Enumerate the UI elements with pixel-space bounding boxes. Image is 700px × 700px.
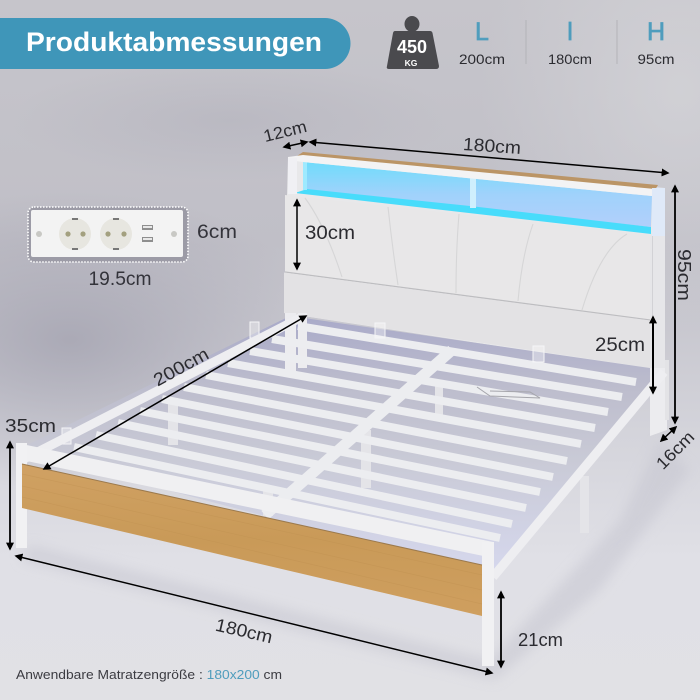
width: 180cm	[548, 51, 592, 67]
dimension: frame length 200cm	[44, 316, 306, 469]
dimension: upholstery 30cm: 30cm	[305, 223, 355, 244]
height: H	[647, 18, 665, 46]
width: l	[567, 18, 573, 46]
title banner	[0, 18, 350, 69]
slats	[74, 326, 636, 538]
middle legs	[168, 385, 589, 533]
dimension: frame width 180cm	[16, 556, 492, 673]
cable	[477, 387, 540, 398]
foot bar	[17, 443, 493, 558]
mattress size note: Anwendbare Matratzengröße : 180x200 cm	[16, 667, 282, 682]
lower fabric	[284, 272, 650, 368]
socket width label: 19.5cm	[88, 269, 152, 290]
brackets	[62, 322, 544, 444]
dimension summary	[459, 18, 674, 67]
dimension: total height 95cm: 95cm	[674, 249, 694, 301]
headboard	[284, 152, 665, 372]
wood foot panel	[22, 464, 482, 616]
socket 2	[100, 218, 132, 250]
shelf back	[303, 162, 652, 227]
title banner: Produktabmessungen	[26, 27, 322, 57]
dimension: leg depth 16cm: 16cm	[652, 427, 698, 473]
icon: weight capacity 450 kg: 450	[397, 37, 427, 57]
shelf divider	[470, 178, 476, 208]
centre spine	[265, 350, 452, 515]
dimension: leg height 21cm: 21cm	[518, 630, 563, 650]
dimension: foot height 35cm	[5, 416, 56, 549]
USB ports	[142, 225, 153, 242]
dimension: foot height 35cm: 35cm	[5, 416, 56, 436]
icon: weight capacity 450 kg	[387, 16, 439, 69]
socket height label: 6cm	[197, 222, 237, 243]
dimension: frame width 180cm: 180cm	[213, 615, 275, 647]
upholstered panel	[285, 195, 652, 320]
wood top of headboard	[297, 152, 658, 190]
dimension: clearance 25cm: 25cm	[595, 335, 645, 356]
height	[638, 18, 674, 67]
shelf floor LED	[295, 189, 651, 234]
dimension: headboard width 180cm	[310, 134, 668, 173]
under-bed area	[17, 316, 664, 577]
dimension: headboard width 180cm: 180cm	[462, 134, 522, 158]
dimension: clearance 25cm	[595, 317, 653, 393]
width	[548, 18, 592, 67]
side rails	[22, 318, 664, 577]
back legs	[285, 313, 669, 436]
dimension: leg height 21cm	[501, 592, 563, 667]
dimension: upholstery 30cm	[297, 200, 355, 269]
length	[459, 18, 505, 67]
floor shadows	[20, 440, 690, 680]
length: 200cm	[459, 51, 505, 67]
icon: weight capacity 450 kg: KG	[405, 58, 418, 68]
length: L	[475, 18, 489, 46]
socket panel	[28, 207, 188, 262]
foot legs	[16, 443, 494, 666]
dimension: frame length 200cm: 200cm	[150, 344, 212, 390]
socket 1	[59, 218, 91, 250]
seams	[305, 198, 627, 310]
height: 95cm	[638, 51, 674, 67]
bed	[16, 152, 690, 680]
dimension: headboard depth 12cm: 12cm	[261, 117, 309, 146]
frame strip	[288, 155, 665, 196]
